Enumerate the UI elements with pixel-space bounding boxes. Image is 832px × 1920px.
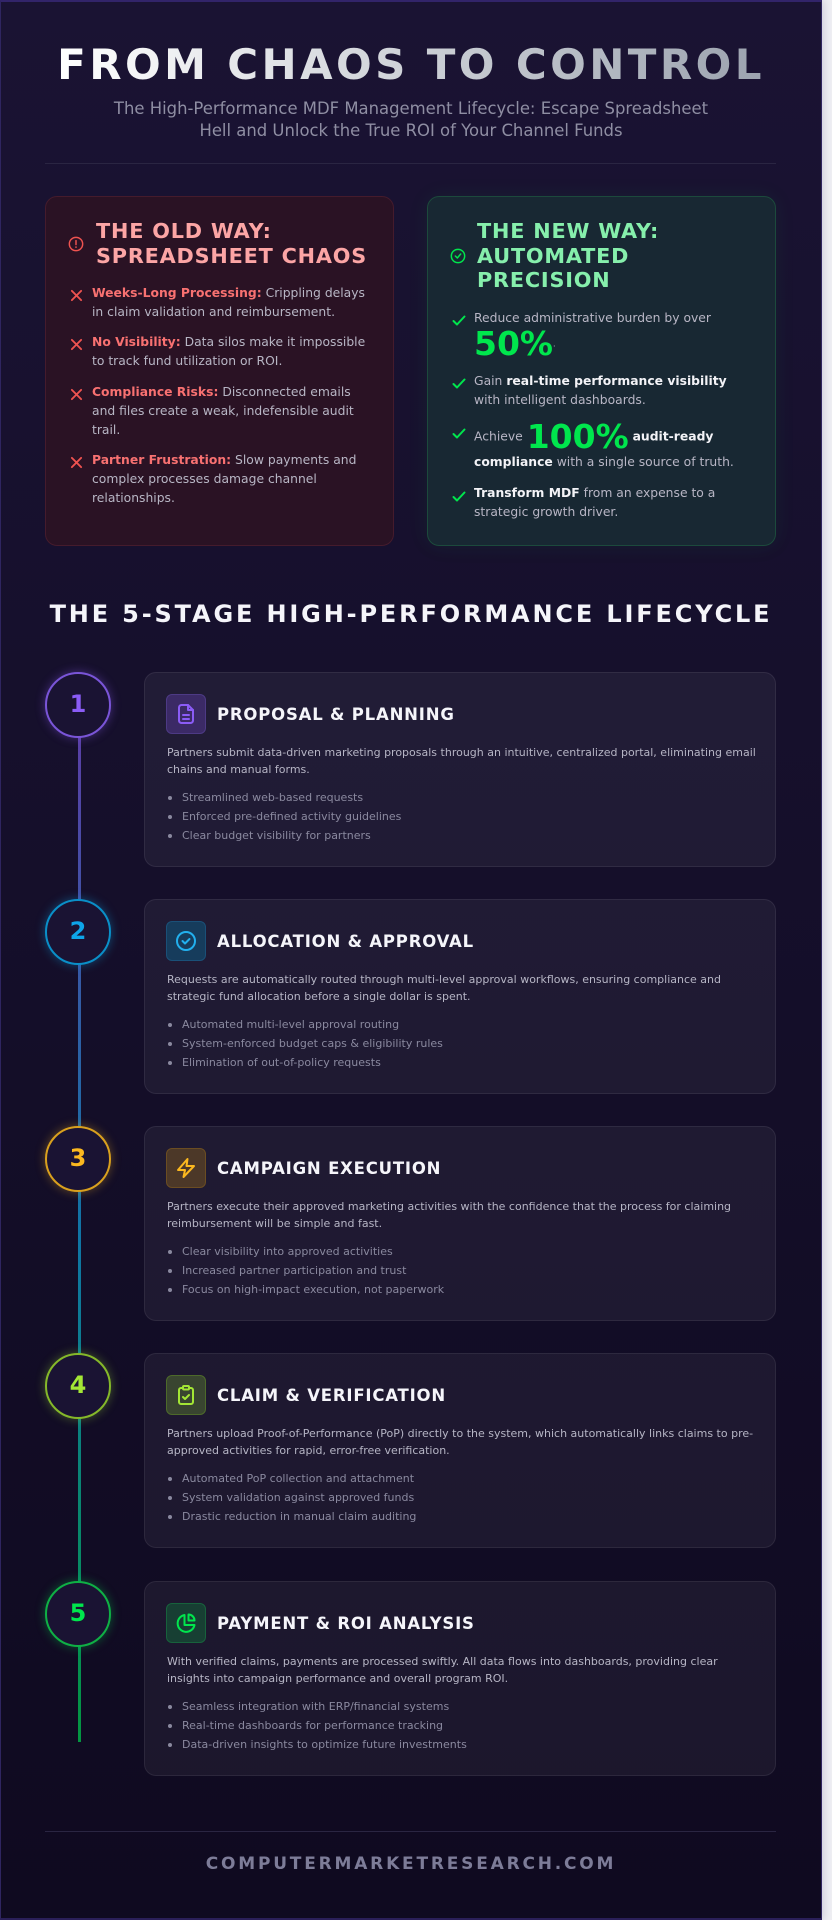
subtitle: Hell and Unlock the True ROI of Your Channel Funds (199, 120, 623, 140)
icon: cross 2 (70, 338, 82, 350)
item: weeks-long processing: in claim validation and reimbursement. (92, 305, 335, 319)
icon: document (166, 694, 206, 734)
item: weeks-long processing (92, 286, 365, 319)
panel: new way (427, 196, 776, 546)
card title: ALLOCATION & APPROVAL (217, 932, 474, 951)
icon: check 2 (452, 378, 466, 388)
card bullets: Streamlined web-based requests (182, 791, 363, 804)
card bullets: Seamless integration with ERP/financial systems (182, 1700, 449, 1713)
card bullets: Data-driven insights to optimize future investments (182, 1738, 467, 1751)
item: partner frustration: relationships. (92, 491, 175, 505)
card bullets: Clear visibility into approved activities (182, 1245, 393, 1258)
item: reduce burden (474, 310, 711, 363)
card bullets (168, 1245, 444, 1296)
card bullets (168, 791, 401, 842)
icon: pie chart (166, 1603, 206, 1643)
card bullets: Clear budget visibility for partners (182, 829, 371, 842)
card title: CLAIM & VERIFICATION (217, 1386, 446, 1405)
card description: Partners submit data-driven marketing proposals through an intuitive, centralized portal, eliminating email (167, 746, 756, 759)
card bullets: Drastic reduction in manual claim auditing (182, 1510, 416, 1523)
card description (167, 1200, 731, 1230)
card description: Partners execute their approved marketing activities with the confidence that the process for claiming (167, 1200, 731, 1213)
step number 2 (45, 899, 111, 965)
heading: new way (477, 219, 659, 292)
heading: old way (96, 219, 367, 268)
step number 4: 4 (70, 1371, 86, 1399)
card description: chains and manual forms. (167, 762, 310, 776)
card bullets: System validation against approved funds (182, 1491, 414, 1504)
card bullets: Automated multi-level approval routing (182, 1018, 399, 1031)
card description: approved activities for rapid, error-free verification. (167, 1444, 450, 1456)
item: transform MDF: strategic growth driver. (474, 505, 618, 519)
card bullets: Automated PoP collection and attachment (182, 1472, 414, 1485)
card: allocation and approval (144, 899, 776, 1094)
step number 2: 2 (70, 917, 86, 945)
item: partner frustration: Partner Frustration: Slow payments and (92, 453, 356, 467)
card bullets: Increased partner participation and trust (182, 1264, 406, 1277)
title: FROM CHAOS TO CONTROL (57, 40, 765, 89)
timeline line (78, 737, 81, 1742)
item: transform MDF (474, 486, 715, 519)
card description: insights into campaign performance and overall program ROI. (167, 1672, 508, 1684)
card bullets: Enforced pre-defined activity guidelines (182, 810, 401, 823)
heading: new way: AUTOMATED (477, 244, 629, 268)
item: compliance risks: and files create a weak, indefensible audit (92, 404, 354, 418)
card: payment and ROI analysis (144, 1581, 776, 1776)
item: no visibility: No Visibility: Data silos make it impossible (92, 335, 365, 349)
card bullets: System-enforced budget caps & eligibility rules (182, 1037, 443, 1050)
card description: Requests are automatically routed through multi-level approval workflows, ensuring compliance and (167, 973, 721, 986)
section heading: THE 5-STAGE HIGH-PERFORMANCE LIFECYCLE (50, 600, 772, 628)
card bullets: Focus on high-impact execution, not paperwork (182, 1283, 444, 1296)
icon: alert circle (68, 236, 84, 252)
item: partner frustration: complex processes damage channel (92, 472, 317, 486)
icon: check 1 (452, 316, 466, 326)
item: compliance risks: Compliance Risks: Disconnected emails (92, 384, 351, 398)
card title: PAYMENT & ROI ANALYSIS (217, 1614, 475, 1633)
item: no visibility: to track fund utilization or ROI. (92, 354, 282, 368)
card bullets: Real-time dashboards for performance tracking (182, 1719, 443, 1732)
footer: COMPUTERMARKETRESEARCH.COM (206, 1854, 616, 1874)
item: audit-ready compliance: compliance with a single source of truth. (474, 455, 734, 469)
card bullets: Elimination of out-of-policy requests (182, 1056, 381, 1069)
heading: new way: PRECISION (477, 268, 610, 292)
item: compliance risks (92, 384, 354, 437)
card description (167, 973, 721, 1002)
heading: old way: SPREADSHEET CHAOS (96, 244, 367, 268)
step number 5 (45, 1581, 111, 1647)
card title: PROPOSAL & PLANNING (217, 705, 455, 724)
heading: old way: THE OLD WAY: (96, 219, 272, 243)
icon: cross 3 (70, 388, 82, 400)
item: partner frustration (92, 453, 356, 505)
step number 5: 5 (70, 1599, 86, 1627)
icon: clipboard check (166, 1375, 206, 1415)
card description (167, 1427, 753, 1456)
step number 1 (45, 672, 111, 738)
card bullets (168, 1018, 443, 1069)
card bullets (168, 1700, 467, 1751)
item: real-time visibility: Gain real-time performance visibility (474, 374, 727, 388)
heading: new way: THE NEW WAY: (477, 219, 659, 243)
item: reduce burden: Reduce administrative burden by over (474, 310, 711, 324)
card description: strategic fund allocation before a single dollar is spent. (167, 990, 471, 1002)
card: claim and verification (144, 1353, 776, 1548)
subtitle (114, 98, 708, 140)
icon: cross 1 (70, 290, 82, 302)
item: audit-ready compliance (474, 417, 734, 469)
icon: check circle (450, 248, 466, 264)
item: reduce burden: 50%. (474, 324, 556, 363)
icon: check 3 (452, 428, 466, 438)
subtitle: The High-Performance MDF Management Lifecycle: Escape Spreadsheet (114, 98, 708, 118)
card bullets (168, 1472, 416, 1523)
icon: cross 4 (70, 456, 82, 468)
item: no visibility (92, 335, 365, 368)
item: transform MDF: Transform MDF from an expense to a (474, 486, 715, 500)
icon: check circle (166, 921, 206, 961)
item: weeks-long processing: Weeks-Long Processing: Crippling delays (92, 286, 365, 300)
step number 4 (45, 1353, 111, 1419)
icon: lightning bolt (166, 1148, 206, 1188)
item: compliance risks: trail. (92, 423, 120, 437)
card description: With verified claims, payments are processed swiftly. All data flows into dashboards, providing clear (167, 1655, 718, 1668)
step number 3 (45, 1126, 111, 1192)
item: real-time visibility: with intelligent dashboards. (474, 393, 646, 407)
card description: Partners upload Proof-of-Performance (PoP) directly to the system, which automatically links claims to pre- (167, 1427, 753, 1440)
step number 1: 1 (70, 690, 86, 718)
icon: check 4 (452, 492, 466, 502)
card: campaign execution (144, 1126, 776, 1321)
card title: CAMPAIGN EXECUTION (217, 1159, 441, 1178)
card description: reimbursement will be simple and fast. (167, 1216, 382, 1230)
card description (167, 746, 756, 776)
item: audit-ready compliance: Achieve 100% audit-ready (474, 417, 713, 456)
card: proposal and planning (144, 672, 776, 867)
item: real-time visibility (474, 374, 727, 407)
panel: old way (45, 196, 394, 546)
card description (167, 1655, 718, 1684)
step number 3: 3 (70, 1144, 86, 1172)
